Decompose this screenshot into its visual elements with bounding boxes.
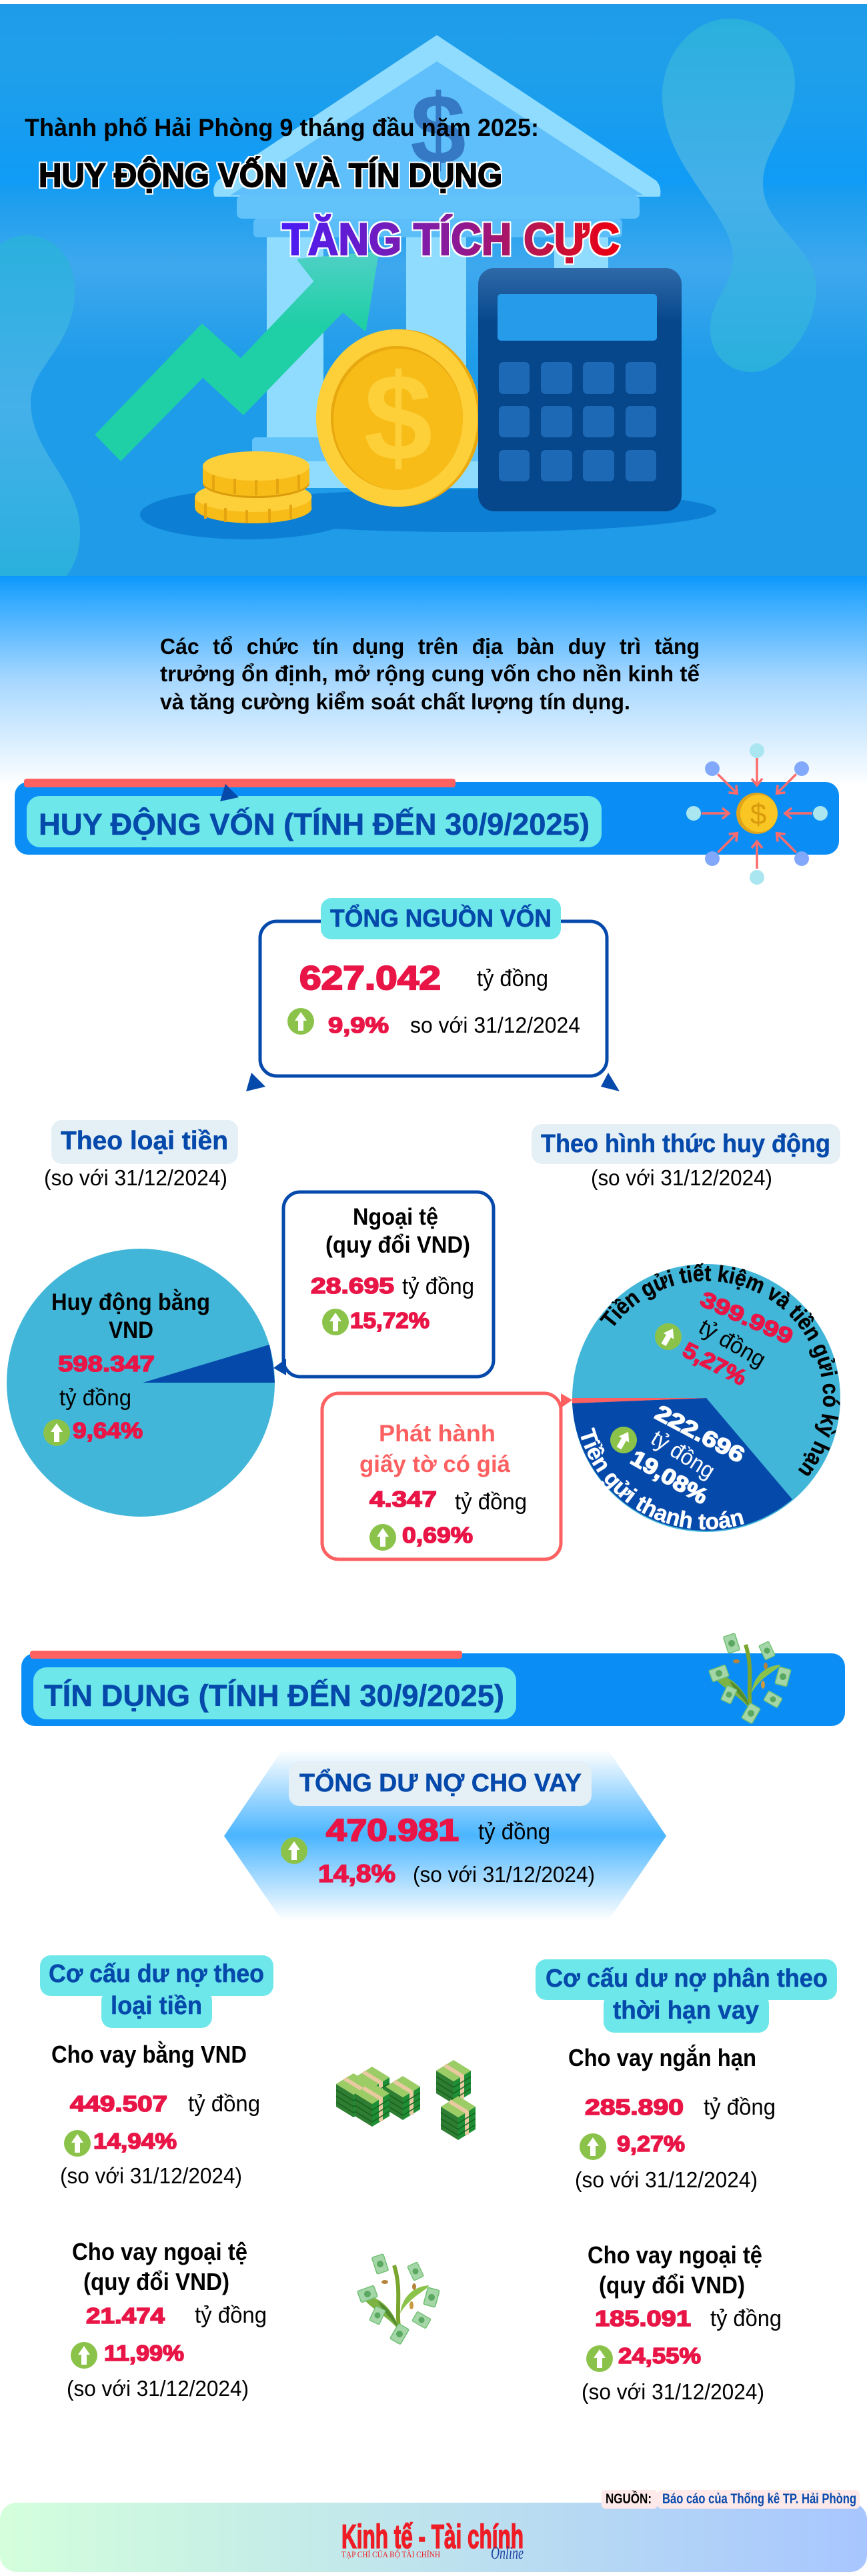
icon: up arrow <box>580 2133 606 2160</box>
pie chart: theo loại tiền <box>7 1249 275 1517</box>
icon: up arrow <box>71 2342 97 2369</box>
block: cho vay ngắn hạn <box>568 2043 776 2192</box>
number: 14,94%: 14,94% <box>93 2129 177 2153</box>
block: cho vay ngoại tệ (phải): (so với 31/12/2024) <box>582 2379 764 2404</box>
icon: large dollar coin <box>316 329 481 507</box>
logo: kinh tế tài chính: Kinh tế - Tài chính <box>341 2518 524 2555</box>
number: 4.347: 4.347 <box>369 1487 437 1511</box>
number: 470.981: 470.981 <box>326 1813 459 1847</box>
label: cơ cấu theo loại tiền: Cơ cấu dư nợ theo <box>49 1960 264 1988</box>
block: cho vay ngoại tệ (phải) <box>582 2241 782 2404</box>
icon: up arrow <box>287 1008 314 1035</box>
icon: large dollar coin: $ <box>364 349 432 487</box>
icon: up arrow <box>64 2130 91 2157</box>
pie chart: theo hình thức huy động <box>572 1263 840 1532</box>
number: 11,99%: 11,99% <box>104 2341 184 2365</box>
section heading: HUY ĐỘNG VỐN (TÍNH ĐẾN 30/9/2025) <box>39 807 590 841</box>
number: 222.696: 222.696 <box>652 1400 749 1467</box>
section banner: tín dụng <box>21 1651 845 1726</box>
title: kicker line: Thành phố Hải Phòng 9 tháng đầu năm 2025: <box>25 114 539 141</box>
curved label: tiền gửi thanh toán: Tiền gửi thanh toán <box>580 1427 744 1529</box>
unit: tỷ đồng <box>646 1425 720 1484</box>
block: cho vay ngoại tệ (phải): Cho vay ngoại tệ <box>588 2241 762 2269</box>
blob: left <box>0 235 80 576</box>
icon: up arrow <box>586 2345 613 2372</box>
icon: up arrow <box>281 1837 307 1864</box>
heading: theo hình thức huy động: Theo hình thức huy động <box>541 1130 830 1158</box>
source note: NGUỒN: <box>606 2491 652 2507</box>
icon: up arrow <box>43 1419 70 1446</box>
slice label: huy động bằng VND: Huy động bằng <box>51 1289 210 1315</box>
logo: online: Online <box>491 2543 524 2563</box>
number: 627.042: 627.042 <box>299 959 441 997</box>
number: 14,8%: 14,8% <box>318 1860 395 1887</box>
block: cho vay ngoại tệ (phải): tỷ đồng <box>710 2306 782 2331</box>
curved label: tiền gửi tiết kiệm: Tiền gửi tiết kiệm và tiền gửi có kỳ hạn <box>599 1263 840 1476</box>
callout: ngoại tệ: Ngoại tệ <box>353 1204 438 1230</box>
heading: theo loại tiền: Theo loại tiền <box>61 1127 228 1155</box>
blob: right <box>662 19 816 372</box>
number: 24,55%: 24,55% <box>618 2343 701 2368</box>
number: 19,08%: 19,08% <box>627 1445 712 1509</box>
title block <box>25 114 620 265</box>
icon: up arrow <box>369 1524 396 1551</box>
number: 15,72%: 15,72% <box>350 1308 429 1333</box>
icon: small coin stack <box>195 451 312 523</box>
comparison note: so với 31/12/2024 <box>410 1013 580 1037</box>
icon: calculator <box>478 268 682 511</box>
block: cho vay ngắn hạn: tỷ đồng <box>704 2095 776 2120</box>
callout: phát hành giấy tờ có giá: giấy tờ có giá <box>359 1451 511 1477</box>
number: 21.474: 21.474 <box>86 2303 165 2328</box>
intro paragraph <box>160 634 700 714</box>
panel: tổng nguồn vốn <box>246 898 620 1091</box>
block: cho vay ngoại tệ (trái): tỷ đồng <box>195 2303 267 2328</box>
icon: bank building: $ <box>410 73 466 185</box>
number: 399.999: 399.999 <box>697 1286 797 1349</box>
block: cho vay ngoại tệ (trái) <box>67 2238 267 2401</box>
icon: up arrow <box>322 1309 349 1335</box>
hero illustration <box>0 19 816 576</box>
block: cho vay bằng VND <box>51 2040 260 2188</box>
panel: tổng dư nợ cho vay: (so với 31/12/2024) <box>413 1862 595 1887</box>
panel: tổng dư nợ cho vay: tỷ đồng <box>478 1819 550 1845</box>
number: 9,9%: 9,9% <box>328 1013 389 1037</box>
number: 5,27%: 5,27% <box>679 1337 751 1390</box>
number: 285.890: 285.890 <box>585 2095 684 2119</box>
section banner: huy động vốn <box>15 779 839 855</box>
block: cho vay ngắn hạn: Cho vay ngắn hạn <box>568 2043 756 2071</box>
footer band with logo <box>0 2503 867 2572</box>
callout: ngoại tệ <box>273 1192 494 1377</box>
block: cho vay ngoại tệ (phải): (quy đổi VND) <box>599 2271 745 2299</box>
title: highlight line: TĂNG TÍCH CỰC <box>282 214 620 265</box>
intro paragraph: và tăng cường kiểm soát chất lượng tín dụng. <box>160 689 630 714</box>
heading: theo loại tiền: (so với 31/12/2024) <box>44 1165 227 1190</box>
icon: growth arrow <box>97 253 377 459</box>
callout: phát hành giấy tờ có giá <box>322 1393 572 1559</box>
number: 185.091: 185.091 <box>595 2306 691 2331</box>
block: cho vay ngoại tệ (trái): (quy đổi VND) <box>83 2268 229 2295</box>
icon: money stacks <box>336 2060 476 2140</box>
number: 598.347: 598.347 <box>58 1351 155 1376</box>
icon: coin with inward arrows <box>686 743 828 885</box>
icon: money plant <box>357 2254 440 2345</box>
heading: theo hình thức huy động <box>532 1124 840 1190</box>
callout: phát hành giấy tờ có giá: tỷ đồng <box>455 1489 527 1515</box>
icon: up arrow <box>606 1422 642 1458</box>
intro paragraph: Các tổ chức tín dụng trên địa bàn duy trì tăng <box>160 634 700 659</box>
icon: money plant <box>709 1633 791 1724</box>
number: 28.695: 28.695 <box>311 1273 394 1298</box>
label: cơ cấu theo loại tiền: loại tiền <box>111 1992 202 2020</box>
unit: tỷ đồng <box>694 1314 770 1373</box>
block: cho vay bằng VND: Cho vay bằng VND <box>51 2040 247 2068</box>
background: fade to white <box>0 576 867 787</box>
heading: tổng nguồn vốn: TỔNG NGUỒN VỐN <box>330 903 552 932</box>
label: cơ cấu theo thời hạn vay: thời hạn vay <box>613 1997 759 2025</box>
block: cho vay ngoại tệ (trái): Cho vay ngoại tệ <box>72 2238 247 2265</box>
number: 9,27%: 9,27% <box>617 2131 685 2156</box>
unit: tỷ đồng <box>59 1385 131 1411</box>
block: cho vay bằng VND: tỷ đồng <box>188 2091 260 2117</box>
unit: tỷ đồng <box>477 966 548 991</box>
number: 9,64%: 9,64% <box>73 1418 143 1443</box>
icon: up arrow <box>650 1319 686 1355</box>
logo tagline: TẠP CHÍ CỦA BỘ TÀI CHÍNH <box>341 2549 440 2559</box>
label: cơ cấu theo loại tiền <box>40 1955 273 2028</box>
heading: theo hình thức huy động: (so với 31/12/2024) <box>591 1165 772 1190</box>
background: hero <box>0 4 867 576</box>
source note <box>602 2490 860 2509</box>
ground shadow <box>140 489 716 539</box>
callout: ngoại tệ: tỷ đồng <box>402 1274 474 1299</box>
icon: coin with inward arrows: $ <box>750 798 766 831</box>
pie chart: theo loại tiền: VND <box>109 1317 153 1343</box>
block: cho vay ngoại tệ (trái): (so với 31/12/2024) <box>67 2376 249 2401</box>
label: cơ cấu theo thời hạn vay: Cơ cấu dư nợ phân theo <box>546 1965 828 1993</box>
callout: ngoại tệ: (quy đổi VND) <box>325 1232 470 1258</box>
title: main line: HUY ĐỘNG VỐN VÀ TÍN DỤNG <box>39 156 502 194</box>
panel: tổng dư nợ cho vay <box>224 1750 666 1921</box>
block: cho vay ngắn hạn: (so với 31/12/2024) <box>575 2167 758 2192</box>
heading: tổng dư nợ cho vay: TỔNG DƯ NỢ CHO VAY <box>299 1767 582 1797</box>
number: 0,69%: 0,69% <box>402 1523 473 1547</box>
number: 449.507: 449.507 <box>70 2091 167 2116</box>
intro paragraph: trưởng ổn định, mở rộng cung vốn cho nền kinh tế <box>160 661 700 686</box>
block: cho vay bằng VND: (so với 31/12/2024) <box>60 2163 242 2188</box>
icon: bank building <box>215 37 659 488</box>
callout: phát hành giấy tờ có giá: Phát hành <box>379 1421 496 1447</box>
section heading: TÍN DỤNG (TÍNH ĐẾN 30/9/2025) <box>44 1679 504 1713</box>
label: cơ cấu theo thời hạn vay <box>536 1959 837 2033</box>
heading: theo loại tiền <box>44 1120 238 1190</box>
